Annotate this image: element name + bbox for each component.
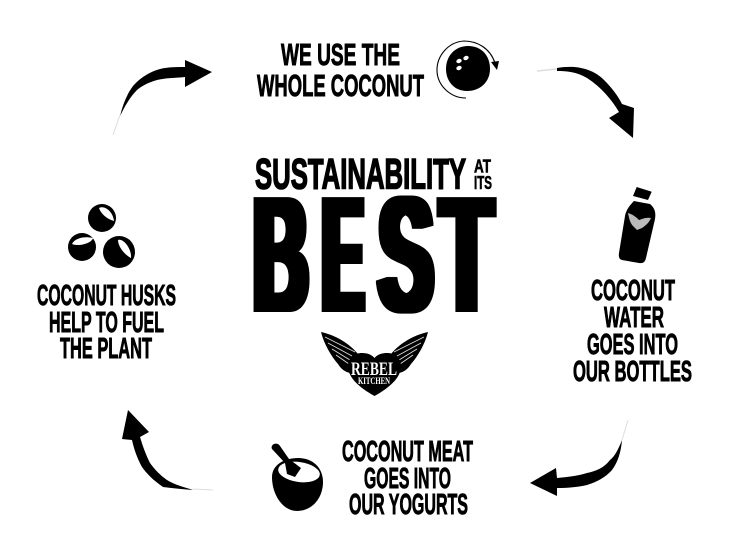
label: we use the whole coconut: WE USE THE	[281, 37, 400, 72]
heading word: best: E	[323, 164, 363, 347]
icon: water bottle	[619, 187, 655, 263]
husk right	[103, 236, 135, 268]
logo: rebel kitchen winged heart	[321, 332, 428, 396]
heading: sustainability at its best	[254, 150, 493, 347]
label: coconut meat goes into our yogurts: GOES INTO	[364, 463, 451, 495]
heart	[348, 353, 401, 396]
husk top	[88, 204, 116, 232]
heading word: best	[254, 163, 493, 347]
label: coconut husks help to fuel the plant	[37, 280, 176, 365]
logo wordmark	[351, 359, 397, 386]
label: we use the whole coconut: WHOLE COCONUT	[257, 68, 424, 103]
left wing	[321, 332, 358, 373]
label: coconut husks help to fuel the plant: COCONUT HUSKS	[37, 280, 176, 312]
heading word: best: T	[440, 163, 493, 346]
icon: rotating coconut	[437, 41, 499, 98]
label: coconut husks help to fuel the plant: HELP TO FUEL	[49, 307, 164, 339]
heading word: best: S	[378, 164, 433, 346]
bottle cap	[633, 187, 652, 200]
label: coconut water goes into our bottles: GOES INTO	[587, 329, 678, 361]
label: coconut water goes into our bottles	[573, 275, 692, 388]
label: coconut water goes into our bottles: COCONUT	[591, 275, 675, 307]
arrow: top right	[537, 67, 634, 138]
arrow: bottom right	[530, 420, 628, 496]
heading small: at its	[474, 156, 492, 193]
heading line: sustainability: SUSTAINABILITY	[255, 150, 466, 198]
label: coconut water goes into our bottles: WATER	[604, 302, 664, 334]
heading word: best: B	[254, 163, 308, 347]
label: coconut meat goes into our yogurts: OUR YOGURTS	[349, 489, 468, 521]
label: coconut meat goes into our yogurts: COCONUT MEAT	[342, 436, 473, 468]
logo wordmark: KITCHEN	[358, 376, 390, 386]
label: coconut husks help to fuel the plant: THE PLANT	[60, 333, 152, 365]
bottle label wings	[628, 213, 651, 230]
label: coconut meat goes into our yogurts	[342, 436, 473, 521]
label: we use the whole coconut	[257, 37, 424, 103]
heading small: at its: AT	[474, 156, 491, 176]
right wing	[391, 332, 428, 373]
arrow: bottom left	[122, 410, 213, 490]
arrow: top left	[113, 60, 212, 135]
bottle body	[619, 201, 655, 263]
heading small: at its: ITS	[474, 173, 492, 193]
husk left	[68, 233, 96, 261]
icon: three coconut husks	[68, 204, 135, 268]
logo wordmark: REBEL	[351, 359, 397, 380]
icon: coconut bowl with spoon	[272, 444, 323, 511]
